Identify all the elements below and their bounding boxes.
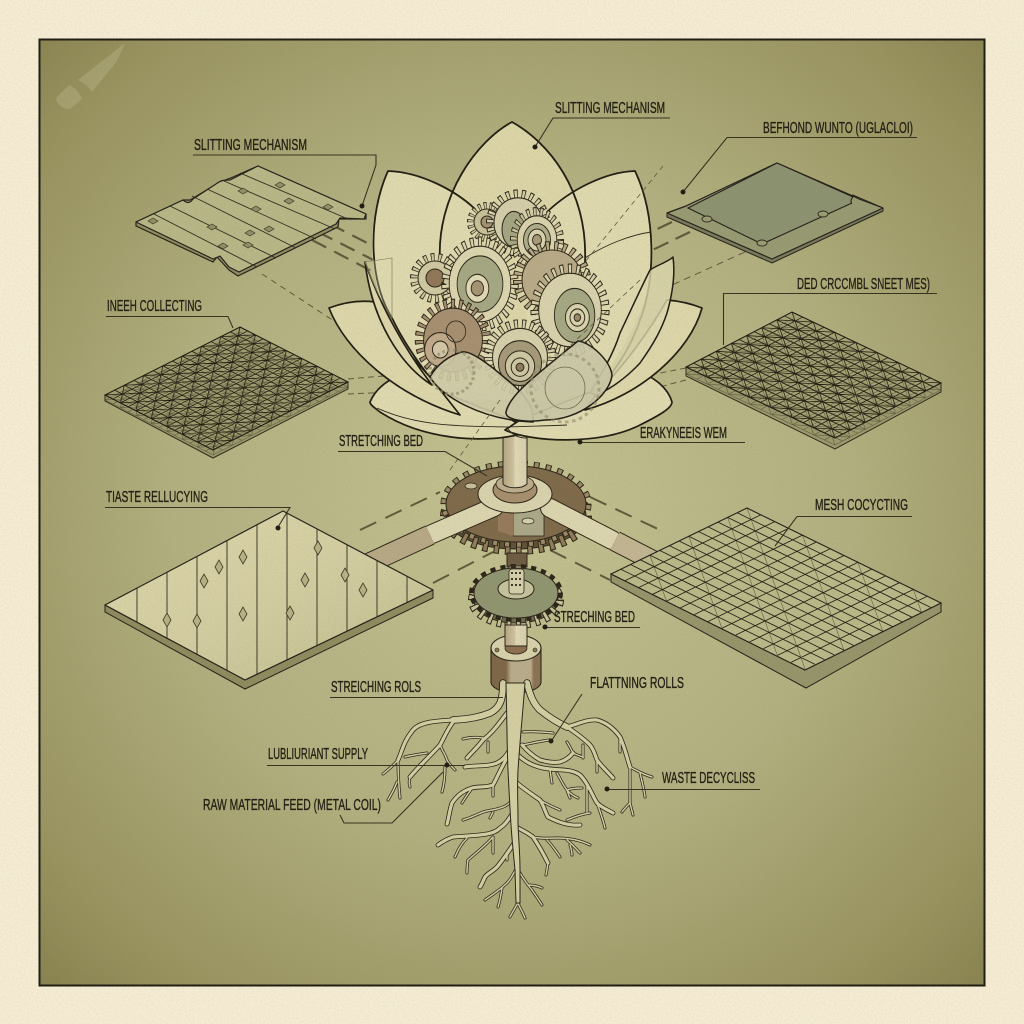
petals: back [372, 122, 653, 400]
petals: front translucent [377, 341, 612, 438]
gear 5 [415, 258, 455, 298]
label: flattning rolls: FLATTNING ROLLS [590, 675, 684, 692]
plate: open mesh lower right [611, 508, 941, 688]
label: slitting mechanism left: SLITTING MECHANISM [194, 137, 307, 154]
gears: cluster [415, 195, 605, 390]
label: taste recycling [105, 489, 290, 530]
root trunk [506, 683, 525, 903]
label: raw material feed: RAW MATERIAL FEED (METAL COIL) [203, 797, 381, 814]
gear 8 [535, 269, 605, 351]
gear 7 [518, 246, 586, 314]
label: flattning rolls [548, 675, 684, 744]
collar [478, 475, 552, 513]
label: top right: BEFHOND WUNTO (UGLACLOI) [763, 120, 913, 137]
label: top right [680, 120, 917, 194]
icon: small gear [472, 567, 560, 623]
label: stretching bed upper [338, 433, 487, 476]
roots hub drum [491, 625, 541, 693]
petals: saucer [370, 372, 672, 440]
label: slitting mechanism top: SLITTING MECHANISM [555, 100, 665, 117]
plate: fine mesh right [686, 312, 941, 449]
label: right upper mesh [724, 276, 937, 345]
shaft between gears [505, 590, 527, 652]
label: mesh cocycting: MESH COCYCTING [815, 497, 908, 514]
stem: central shaft, gears and roots hub [365, 430, 675, 693]
plate: sage sheet top right [667, 163, 883, 263]
plate: fine mesh left [105, 327, 348, 458]
arm: right tube [550, 508, 675, 572]
icon: upper large gear [444, 464, 588, 549]
guide lines between plates and lotus [262, 222, 745, 583]
gear 3 [514, 212, 560, 268]
label: waste decycliss: WASTE DECYCLISS [662, 770, 755, 787]
label: lubliuriant supply: LUBLIURIANT SUPPLY [268, 746, 368, 763]
upper shaft [503, 430, 527, 488]
lotus flower with gears [329, 122, 702, 470]
decorative smudge [56, 43, 125, 109]
gear 2 [491, 195, 545, 251]
roots [383, 683, 652, 918]
label: erakyneeis wem: ERAKYNEEIS WEM [640, 425, 727, 442]
label: streching bed lower: STRECHING BED [554, 609, 635, 626]
label: mesh cocycting [775, 497, 912, 546]
label: inner collecting [106, 298, 233, 328]
plate: slitted sheet top left [136, 166, 366, 276]
guide lines inside lotus [450, 166, 663, 470]
petals: wide sides [329, 262, 702, 415]
arm: left tube [365, 507, 494, 565]
label: raw material feed [203, 772, 443, 823]
gear 4 [446, 242, 514, 326]
coupling [507, 553, 527, 598]
label: stretching rols: STREICHING ROLS [331, 679, 421, 696]
plate: diamond sheet lower left [105, 511, 433, 689]
label: stretching bed upper: STRETCHING BED [339, 433, 423, 450]
gear 6 [420, 304, 486, 376]
label: right upper mesh: DED CRCCMBL SNEET MES) [797, 276, 930, 293]
label: streching bed lower [542, 609, 640, 630]
label: waste decycliss [604, 770, 760, 792]
label: taste recycling: TIASTE RELLUCYING [106, 489, 208, 506]
gear 9 [489, 324, 551, 390]
label: inner collecting: INEEH COLLECTING [107, 298, 202, 315]
gear 1 [471, 206, 503, 238]
label: slitting mechanism left [193, 137, 376, 208]
label: erakyneeis wem [578, 425, 745, 444]
label: lubliuriant supply [267, 746, 465, 768]
label: slitting mechanism top [532, 100, 670, 150]
petals: translucent sides [365, 257, 674, 395]
